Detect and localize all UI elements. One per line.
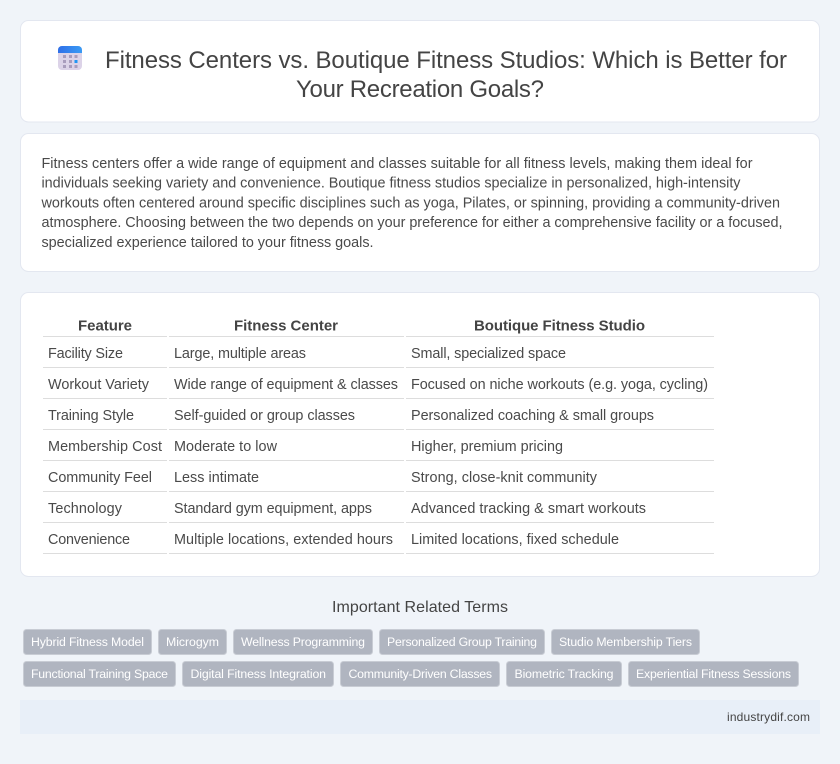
table row: facility size: Small, specialized space: [411, 346, 566, 362]
table header: Feature: [78, 318, 132, 334]
table row: community feel: [48, 470, 598, 486]
table row: facility size: Large, multiple areas: [174, 346, 306, 362]
table row: technology: Standard gym equipment, apps: [174, 501, 372, 517]
text block: description: workouts often centered around specific disciplines such as yoga, Pilates, or spinning, providing a community-driven: [40, 196, 780, 212]
table row: membership cost: Moderate to low: [174, 439, 278, 455]
table row: training style: Self-guided or group classes: [174, 408, 355, 424]
tag: [380, 630, 544, 654]
tag: [340, 662, 500, 686]
table row: membership cost: [48, 439, 563, 455]
tag: Community-Driven Classes: [348, 667, 492, 681]
tag: [552, 630, 700, 654]
tag: Studio Membership Tiers: [559, 635, 692, 649]
text block: description: specialized experience tailored to your fitness goals.: [42, 235, 374, 251]
title: Your Recreation Goals?: [296, 76, 544, 103]
tag: [158, 630, 226, 654]
table row: facility size: Facility Size: [48, 346, 123, 362]
table row: technology: Technology: [48, 501, 123, 517]
table row: community feel: Strong, close-knit community: [411, 470, 598, 486]
tag: Functional Training Space: [31, 667, 168, 681]
table row: convenience: [48, 532, 619, 548]
tag: Wellness Programming: [241, 635, 365, 649]
footer: industrydif.com: [727, 710, 810, 724]
table row: workout variety: Workout Variety: [48, 377, 150, 393]
heading: related terms: Important Related Terms: [332, 599, 508, 616]
tag: [506, 662, 622, 686]
tag: [24, 630, 152, 654]
panel: description: [20, 134, 820, 272]
tag: Hybrid Fitness Model: [31, 635, 144, 649]
table row: membership cost: Membership Cost: [48, 439, 162, 455]
table row: workout variety: Wide range of equipment & classes: [174, 377, 398, 393]
table header: Boutique Fitness Studio: [474, 318, 645, 334]
tag: Digital Fitness Integration: [190, 667, 326, 681]
text block: description: atmosphere. Choosing between the two depends on your preference for either a comprehensive facility or a focused,: [42, 215, 782, 231]
tags: related terms: [24, 630, 798, 686]
table row: convenience: Limited locations, fixed schedule: [411, 532, 619, 548]
table row: technology: Advanced tracking & smart workouts: [411, 501, 646, 517]
icon: calendar: [58, 46, 82, 70]
tag: [234, 630, 372, 654]
text block: description: Fitness centers offer a wide range of equipment and classes suitable for all fitness levels, making them ideal for: [42, 156, 753, 172]
table row: convenience: Convenience: [48, 532, 130, 548]
text block: description: [40, 156, 782, 251]
table row: training style: Personalized coaching & small groups: [411, 408, 654, 424]
tag: [182, 662, 334, 686]
table row: training style: [48, 408, 654, 424]
tag: Microgym: [166, 635, 219, 649]
table row: community feel: Community Feel: [48, 470, 152, 486]
table row: technology: [48, 501, 646, 517]
tag: Biometric Tracking: [514, 667, 614, 681]
table row: training style: Training Style: [48, 408, 134, 424]
table row: facility size: [48, 346, 566, 362]
tag: [628, 662, 798, 686]
table header: Fitness Center: [234, 318, 338, 334]
table header: [78, 318, 645, 334]
panel: title card: [20, 20, 820, 122]
tag: [24, 662, 176, 686]
table row: workout variety: Focused on niche workouts (e.g. yoga, cycling): [411, 377, 708, 393]
text block: description: individuals seeking variety and convenience. Boutique fitness studios specialize in personalized, high-intensity: [42, 176, 741, 192]
title: [105, 47, 787, 103]
panel: comparison table: [20, 292, 820, 576]
title: Fitness Centers vs. Boutique Fitness Studios: Which is Better for: [105, 47, 787, 74]
tag: Experiential Fitness Sessions: [636, 667, 791, 681]
footer: [20, 700, 820, 734]
table row: convenience: Multiple locations, extended hours: [174, 532, 393, 548]
tag: Personalized Group Training: [387, 635, 537, 649]
table row: membership cost: Higher, premium pricing: [411, 439, 563, 455]
table row: workout variety: [48, 377, 708, 393]
table row: community feel: Less intimate: [174, 470, 259, 486]
